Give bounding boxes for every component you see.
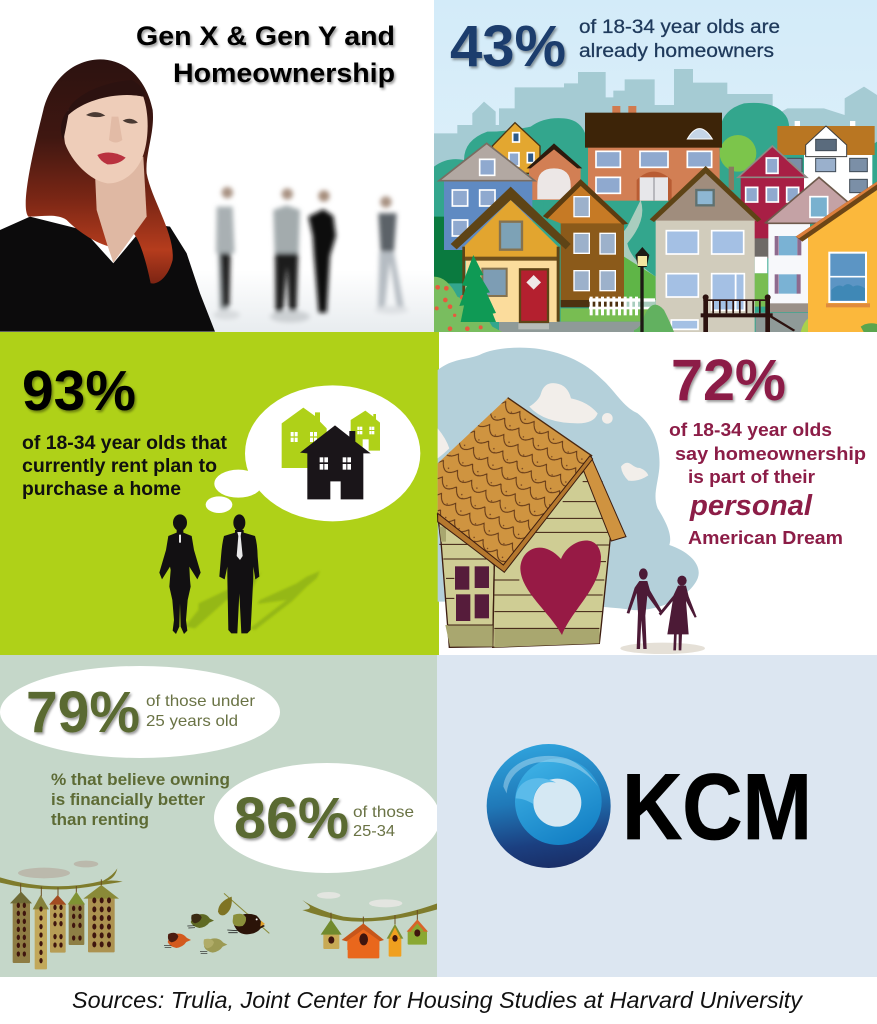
house: blue with grey gable <box>439 143 535 250</box>
panel: 93% plan to purchase <box>0 332 437 655</box>
house: yellow with red door <box>451 187 571 329</box>
picket fence <box>589 297 655 315</box>
text: owning financially better <box>51 771 230 829</box>
house: crimson <box>738 146 807 258</box>
callout: 86%: of those <box>353 804 414 821</box>
house: yellow right <box>796 182 877 332</box>
house: arched brick <box>527 143 582 200</box>
street lamp <box>635 247 649 332</box>
house: small orange back <box>492 123 540 173</box>
text: American Dream <box>669 419 866 548</box>
cloud shapes <box>438 383 648 481</box>
callout: 79%: 79% <box>26 680 140 745</box>
callout: 79%: 25 years old <box>146 713 238 730</box>
stat: 43%: 43% <box>450 14 566 79</box>
illustration: hanging tall birdhouses <box>0 861 123 969</box>
text: already homeowners <box>579 16 780 62</box>
house: white and mauve <box>755 177 847 312</box>
silhouette shadows <box>185 571 320 630</box>
text: renters plan to purchase: currently rent plan to <box>22 455 217 477</box>
silhouette: man with tie <box>219 514 259 633</box>
text: American Dream: of 18-34 year olds <box>669 419 832 440</box>
house: white with orange roof <box>777 121 875 203</box>
thought cloud <box>438 348 699 610</box>
thought bubble with houses <box>206 385 420 521</box>
railing bridge <box>701 294 795 332</box>
illustration: hanging colourful birdhouses <box>302 892 437 958</box>
text: owning financially better: is financially better <box>51 791 206 809</box>
text: owning financially better: than renting <box>51 811 149 829</box>
silhouette: woman <box>159 514 201 634</box>
house roof <box>438 398 626 572</box>
callout: 86%: 86% <box>234 786 349 851</box>
photo: blurred people in background <box>213 187 408 323</box>
panel: KCM logo <box>437 655 877 977</box>
title: Homeownership <box>173 58 395 88</box>
text: owning financially better: % that believe owning <box>51 771 230 789</box>
wordmark: KCM: KCM <box>622 754 812 859</box>
text: already homeowners: of 18-34 year olds are <box>579 16 780 38</box>
illustration: flying birds <box>164 893 269 954</box>
title: Gen X & Gen Y and <box>136 21 395 51</box>
heart <box>520 541 601 635</box>
panel: 72% American Dream <box>437 332 877 655</box>
panel: title and photo <box>0 0 434 332</box>
ground <box>499 322 656 332</box>
text: renters plan to purchase: purchase a home <box>22 478 181 500</box>
callout: 86% <box>214 763 440 873</box>
callout: 86%: 25-34 <box>353 823 395 840</box>
stat: 93%: 93% <box>22 359 136 423</box>
icon: KCM swirl <box>487 744 611 868</box>
photo: woman <box>0 59 215 332</box>
house: brown <box>544 180 627 307</box>
text: renters plan to purchase: of 18-34 year olds that <box>22 432 227 454</box>
stat: 72%: 72% <box>671 348 786 413</box>
panel: owning vs renting <box>0 655 440 977</box>
callout: 79%: of those under <box>146 693 256 710</box>
shrubs and tree <box>434 255 808 332</box>
house walls <box>438 463 611 647</box>
callout: 79% <box>0 666 280 758</box>
text: American Dream: American Dream <box>688 527 843 548</box>
text: renters plan to purchase <box>22 432 227 500</box>
text: American Dream: personal <box>689 490 813 522</box>
panel: 43% homeowners <box>434 0 877 332</box>
footer: sources: Sources: Trulia, Joint Center for Housing Studies at Harvard University <box>72 987 804 1013</box>
house: beige centre <box>650 166 761 332</box>
text: already homeowners: already homeowners <box>579 40 774 62</box>
title <box>136 21 395 88</box>
couple <box>620 568 705 654</box>
text: American Dream: is part of their <box>688 466 815 487</box>
text: American Dream: say homeownership <box>675 443 866 464</box>
illustration: neighbourhood of houses <box>434 69 877 332</box>
house: large brick with dark roof <box>585 106 722 201</box>
